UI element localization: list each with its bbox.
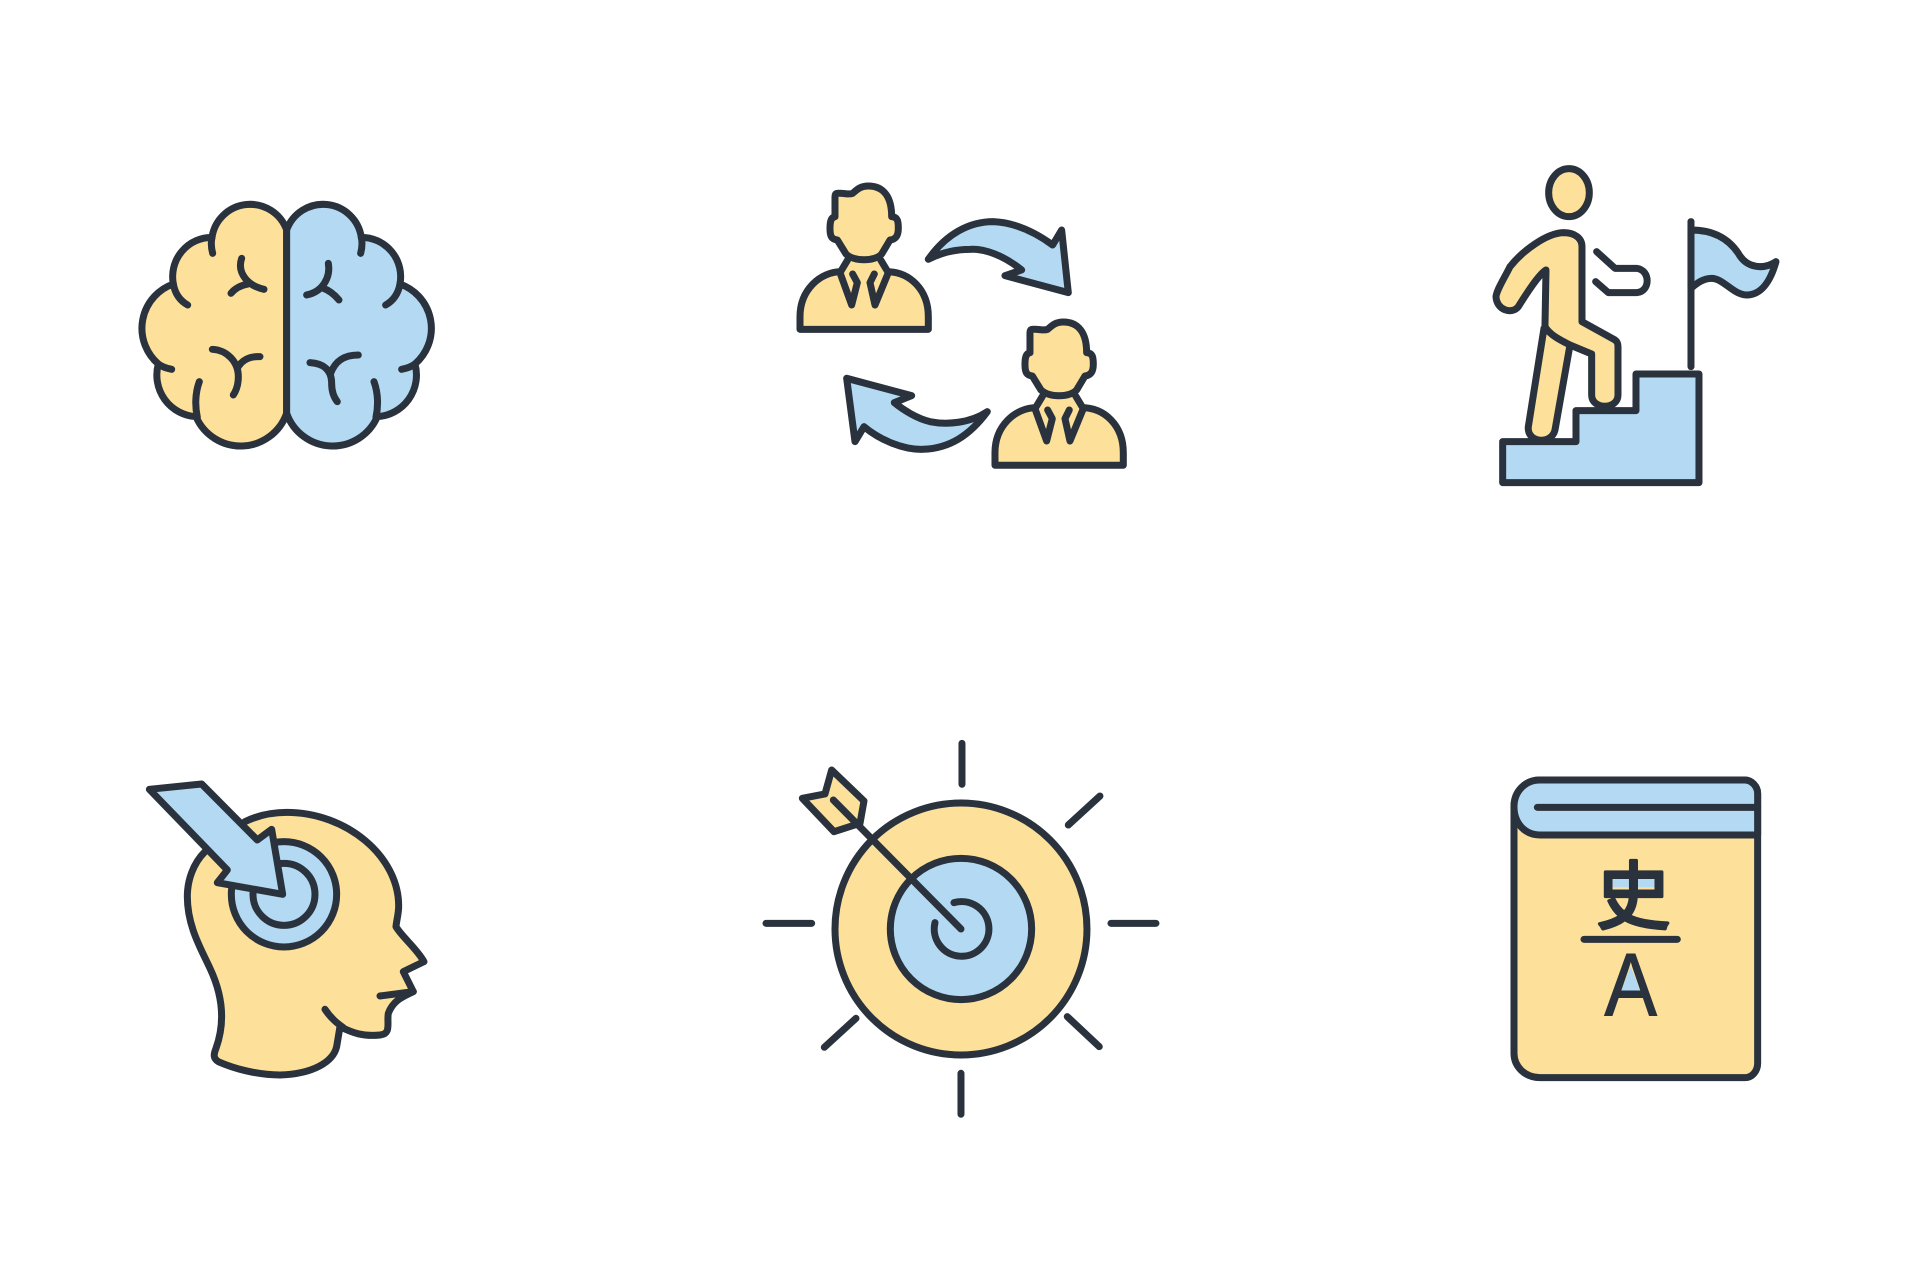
outer ring <box>835 803 1087 1055</box>
flag <box>1691 230 1776 295</box>
icon: people exchange <box>800 186 1123 465</box>
stairs <box>1503 374 1699 483</box>
person top left <box>800 186 928 329</box>
icon: target with arrow <box>766 743 1156 1114</box>
bullseye spiral <box>934 902 989 956</box>
icon: dictionary book <box>1514 780 1758 1078</box>
head profile <box>187 812 424 1075</box>
arrow right <box>928 222 1068 293</box>
chinese character: 史 <box>1596 838 1670 945</box>
latin letter: A <box>1604 935 1657 1035</box>
flag pole <box>1680 222 1701 367</box>
icon: climbing stairs to flag <box>1496 169 1776 483</box>
book spine band <box>1514 780 1758 835</box>
far arm <box>1596 252 1647 293</box>
glyph backgrounds <box>1613 871 1655 992</box>
person bottom right <box>995 322 1123 465</box>
icon: brain <box>142 204 431 446</box>
icon: head with target <box>149 784 424 1075</box>
inner ring <box>890 858 1032 1000</box>
arrow left <box>847 378 987 449</box>
back leg <box>1528 328 1570 440</box>
fletching <box>802 770 864 832</box>
arrow <box>149 784 283 894</box>
head <box>1549 169 1589 217</box>
target rings <box>231 842 337 947</box>
rays <box>766 743 1156 1114</box>
shaft <box>833 800 961 929</box>
body <box>1496 233 1618 406</box>
book cover <box>1514 780 1758 1078</box>
